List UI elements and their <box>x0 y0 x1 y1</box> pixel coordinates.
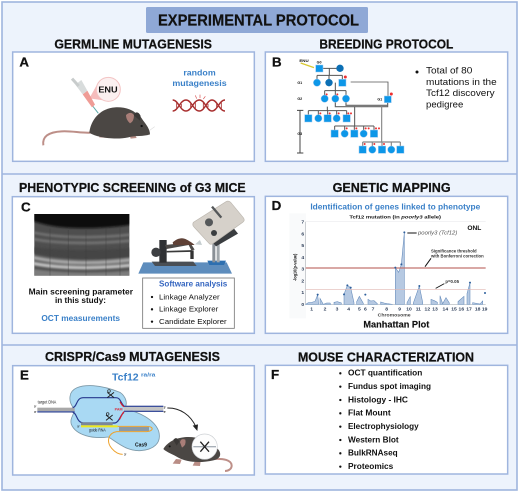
text: mutation total <box>415 66 497 109</box>
arrow: to knockout mouse <box>167 408 198 431</box>
diagram: Cas9 complex: 3' <box>124 453 127 457</box>
icon: ENU callout: ENU <box>98 86 118 95</box>
text: main screening parameter: in this study: <box>55 296 106 305</box>
list: characterization methods: Histology - IHC <box>348 395 408 404</box>
text: random mutagenesis: mutagenesis <box>172 79 227 88</box>
text: main screening parameter: OCT measurements <box>41 314 121 323</box>
text: mutation total: Total of 80 <box>426 66 472 76</box>
icon: imaging stage microscope <box>138 201 244 274</box>
heading: breeding protocol: BREEDING PROTOCOL <box>319 38 454 52</box>
Manhattan plot: p=0.05 <box>445 279 459 284</box>
pedigree chart: G2 <box>297 97 302 101</box>
Manhattan plot: 3 <box>336 306 339 312</box>
icon: knockout mouse <box>163 434 232 471</box>
diagram: Cas9 complex: 3' <box>34 410 37 414</box>
Manhattan plot: 1 <box>301 290 304 296</box>
diagram: Cas9 complex: 3' <box>164 405 166 409</box>
Manhattan plot: 5 <box>358 306 361 312</box>
panel: breeding protocol <box>265 38 508 161</box>
Manhattan plot: 18 <box>475 306 481 312</box>
pedigree chart <box>297 59 404 153</box>
chart caption: Manhattan Plot: Manhattan Plot <box>363 320 429 330</box>
list: characterization methods: BulkRNAseq <box>348 449 398 458</box>
icon: black mouse <box>43 107 155 145</box>
Manhattan plot: Significance threshold <box>431 248 477 253</box>
box: software analysis: Candidate Explorer <box>159 317 227 326</box>
Manhattan plot: 13 <box>432 306 438 312</box>
panel: mouse characterization: F <box>271 367 279 382</box>
diagram: Cas9 complex: guide RNA <box>89 427 106 432</box>
text: mutation total: Tcf12 discovery <box>426 88 495 98</box>
heading: genetic mapping: GENETIC MAPPING <box>333 181 451 195</box>
label: Tcf12 ra/ra: ra/ra <box>141 372 156 378</box>
label: Tcf12 ra/ra: Tcf12 <box>112 372 139 383</box>
text: main screening parameter <box>29 287 133 323</box>
Manhattan plot: 11 <box>416 306 421 312</box>
text: random mutagenesis <box>172 68 227 88</box>
Manhattan plot <box>289 213 488 318</box>
diagram: Cas9 complex: 5' <box>34 405 37 409</box>
panel: breeding protocol: B <box>272 55 282 70</box>
Manhattan plot: poorly3 (Tcf12) <box>417 230 458 236</box>
text: random mutagenesis: random <box>183 68 216 77</box>
heading: germline mutagenesis: GERMLINE MUTAGENESIS <box>54 38 212 52</box>
panel: CRISPR/Cas9 mutagenesis: E <box>20 368 29 383</box>
text: main screening parameter: Main screening parameter <box>29 287 133 296</box>
title <box>146 7 368 33</box>
icon: DNA helix <box>173 95 225 111</box>
chart title: Identification of genes linked to phenotype <box>310 201 481 211</box>
panel: genetic mapping <box>265 181 508 333</box>
panel: mouse characterization <box>265 350 508 474</box>
Manhattan plot: 2 <box>324 306 327 312</box>
diagram: Cas9 complex <box>34 386 166 457</box>
list: characterization methods: Western Blot <box>348 435 399 444</box>
Manhattan plot: 4 <box>347 306 350 312</box>
list: characterization methods: Fundus spot imaging <box>348 382 431 391</box>
list: characterization methods: OCT quantification <box>348 369 422 378</box>
list: characterization methods: Electrophysiology <box>348 422 419 431</box>
text: mutation total: pedigree <box>426 99 463 109</box>
panel: phenotypic screening <box>12 181 254 333</box>
panel: phenotypic screening: C <box>21 200 31 215</box>
heading: phenotypic screening: PHENOTYPIC SCREENING of G3 MICE <box>19 181 246 195</box>
panel: germline mutagenesis: A <box>19 55 29 70</box>
Manhattan plot: 14 <box>443 306 448 312</box>
box: software analysis: Linkage Explorer <box>159 305 219 314</box>
list: characterization methods: Flat Mount <box>348 409 391 418</box>
chart subtitle: Tcf12 mutation (in poorly3 allele) <box>349 214 441 220</box>
diagram: Cas9 complex: 5' <box>164 410 166 414</box>
Manhattan plot: 7 <box>372 306 375 312</box>
diagram: Cas9 complex: PAM <box>115 407 123 411</box>
pedigree chart: G3 <box>297 132 302 136</box>
Manhattan plot: ONL <box>467 226 482 232</box>
Manhattan plot: 5 <box>301 243 304 249</box>
Manhattan plot: 17 <box>466 306 472 312</box>
diagram: Cas9 complex: Cas9 <box>135 443 147 449</box>
Manhattan plot: 6 <box>364 306 367 312</box>
Manhattan plot: 7 <box>301 220 304 226</box>
Manhattan plot: 10 <box>406 306 412 312</box>
list: characterization methods <box>339 369 431 471</box>
Manhattan plot: 6 <box>301 231 304 237</box>
panel: genetic mapping: D <box>272 198 282 213</box>
icon: ENU callout <box>89 77 120 101</box>
title: EXPERIMENTAL PROTOCOL <box>158 12 359 30</box>
Manhattan plot: with Bonferroni correction <box>430 253 484 258</box>
Manhattan plot: 9 <box>398 306 401 312</box>
Manhattan plot: 2 <box>301 278 304 284</box>
Manhattan plot: 4 <box>301 255 304 261</box>
heading: mouse characterization: MOUSE CHARACTERIZATION <box>298 350 474 364</box>
Manhattan plot: 19 <box>482 306 488 312</box>
Manhattan plot: Chromosome <box>378 312 411 317</box>
Manhattan plot: 3 <box>301 267 304 273</box>
list: characterization methods: Proteomics <box>348 462 394 471</box>
box: software analysis <box>143 278 234 328</box>
label: Tcf12 ra/ra <box>112 372 156 383</box>
text: mutation total: mutations in the <box>426 77 497 87</box>
Manhattan plot: 1 <box>310 306 313 312</box>
Manhattan plot: 8 <box>385 306 388 312</box>
Manhattan plot: 16 <box>459 306 464 312</box>
panel: germline mutagenesis <box>13 38 254 161</box>
panel: CRISPR/Cas9 mutagenesis <box>13 350 254 475</box>
Manhattan plot: -log10(p-value) <box>293 253 298 281</box>
Manhattan plot: 15 <box>451 306 457 312</box>
pedigree chart: ENU <box>299 59 309 63</box>
box: software analysis: Software analysis <box>159 280 228 289</box>
pedigree chart: G1 <box>297 81 302 85</box>
icon: syringe <box>72 79 98 113</box>
diagram: Cas9 complex: target DNA <box>38 400 56 405</box>
Manhattan plot: 12 <box>425 306 430 312</box>
box: software analysis: Linkage Analyzer <box>159 292 220 301</box>
pedigree chart: G1 <box>377 97 382 101</box>
Manhattan plot: 0 <box>301 302 304 308</box>
OCT scan image <box>34 214 130 276</box>
diagram: Cas9 complex: 5' <box>77 425 80 429</box>
heading: CRISPR/Cas9 mutagenesis: CRISPR/Cas9 MUTAGENESIS <box>45 350 220 364</box>
pedigree chart: G0 <box>317 60 322 64</box>
